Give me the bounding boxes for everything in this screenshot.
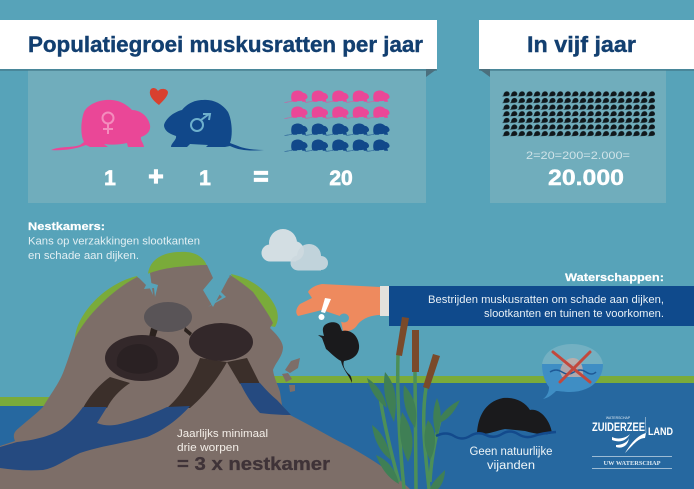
tunnels earth (83, 377, 130, 408)
equation: + (148, 161, 164, 191)
text: nest chambers (28, 221, 200, 262)
illustration: dike with nest chambers (0, 252, 410, 489)
icon: male muskrat (164, 100, 264, 151)
panel: population growth per year (28, 70, 426, 203)
heading: in five years: In vijf jaar (527, 32, 636, 57)
heading: population growth (0, 20, 437, 77)
equation: 20 (329, 167, 353, 190)
banner: water boards: Waterschappen: (565, 272, 664, 284)
nest chamber right (189, 323, 253, 361)
illustration: swimming muskrat (436, 398, 556, 438)
speech bubble: no natural enemies (542, 344, 603, 399)
icon: clouds (262, 229, 328, 270)
nest chamber top (144, 302, 192, 332)
exclamation mark (318, 298, 331, 320)
logo: Zuiderzeeland: ZUIDERZEE (592, 420, 645, 434)
text: nest chambers: Nestkamers: (28, 221, 105, 233)
banner: water boards (389, 272, 694, 326)
dike body (0, 265, 410, 489)
logo: Zuiderzeeland (592, 416, 673, 469)
equation: 1 (199, 167, 211, 190)
banner: water boards: Bestrijden muskusratten om schade aan dijken, (428, 294, 664, 306)
heading: in five years (479, 20, 694, 77)
text: three litters: Jaarlijks minimaal (177, 428, 268, 440)
icon: heart (150, 88, 168, 105)
text: no natural enemies: Geen natuurlijke (470, 446, 552, 458)
nest chamber left (105, 335, 179, 381)
banner: water boards: slootkanten en tuinen te voorkomen. (484, 308, 664, 320)
text: nest chambers: Kans op verzakkingen slootkanten (28, 236, 200, 248)
grass on dike (75, 252, 278, 340)
heading: population growth: Populatiegroei muskusratten per jaar (28, 32, 423, 57)
equation (104, 161, 353, 191)
water and banks (0, 376, 694, 489)
hanging muskrat (318, 322, 359, 383)
text: no natural enemies: vijanden (487, 460, 535, 472)
crack right (208, 275, 232, 307)
illustration: reeds (367, 317, 460, 489)
hand finger hole (339, 314, 349, 322)
red cross (553, 352, 590, 382)
text: three litters (177, 428, 330, 474)
tunnels water (0, 406, 190, 470)
text: three litters: = 3 x nestkamer (177, 454, 330, 474)
logo: Zuiderzeeland: WATERSCHAP (606, 416, 631, 420)
panel: in five years (490, 70, 666, 203)
total number: 20.000 (548, 165, 624, 190)
text: no natural enemies (470, 446, 552, 472)
icon grid: many muskrats (502, 90, 655, 137)
rubble (282, 358, 300, 392)
icon: hand holding muskrat (296, 284, 389, 383)
logo: Zuiderzeeland: LAND (648, 426, 673, 438)
crack left (138, 273, 158, 297)
logo: Zuiderzeeland: UW WATERSCHAP (604, 461, 661, 467)
text: nest chambers: en schade aan dijken. (28, 250, 139, 262)
icon grid: twenty small muskrats (284, 91, 390, 152)
icon: female muskrat (51, 100, 150, 150)
text: three litters: drie worpen (177, 442, 239, 454)
equation: = (253, 161, 269, 191)
equation: 1 (104, 167, 116, 190)
series text: 2=20=200=2.000= (526, 150, 630, 162)
